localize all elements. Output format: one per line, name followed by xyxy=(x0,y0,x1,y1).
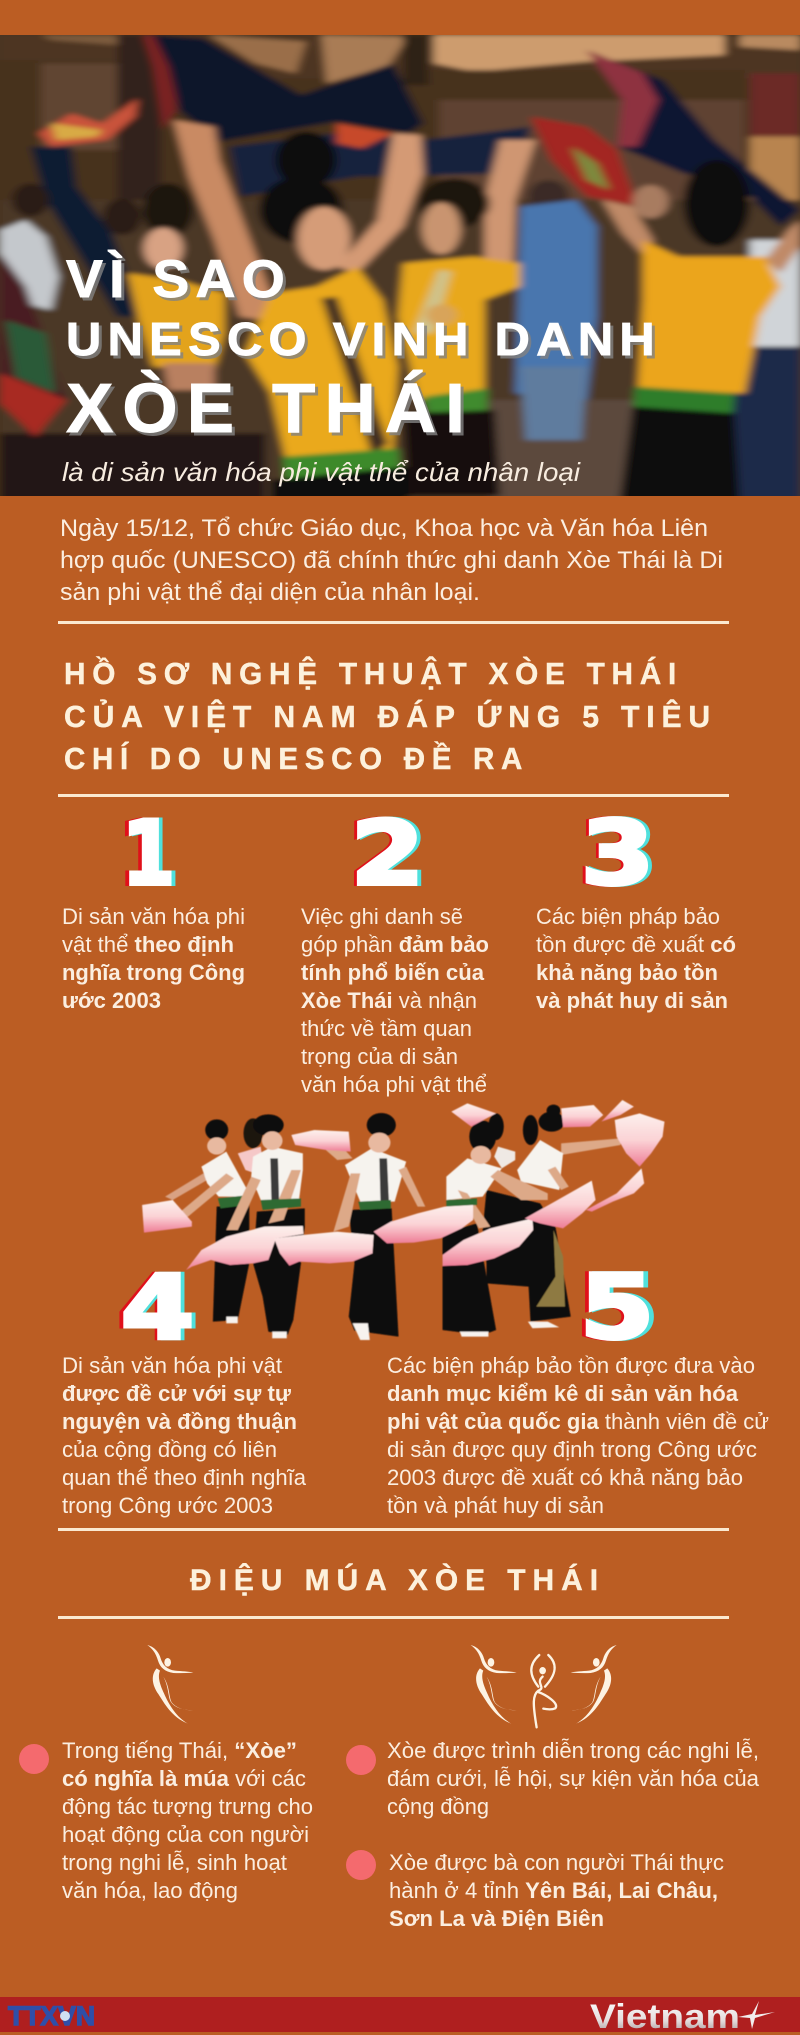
number 2: 2 xyxy=(348,802,422,905)
criterion 5 text: 2003 được đề xuất có khả năng bảo xyxy=(387,1465,743,1490)
heading: five criteria xyxy=(64,655,717,776)
criterion 2 text: thức về tầm quan xyxy=(301,1016,472,1041)
heading: the Xòe Thái dance: ĐIỆU MÚA XÒE THÁI xyxy=(190,1563,605,1597)
criterion 3 text: và phát huy di sản xyxy=(536,988,728,1013)
criterion 2 text: văn hóa phi vật thể xyxy=(301,1072,487,1097)
text: meaning of Xòe: động tác tượng trưng cho xyxy=(62,1794,313,1819)
criterion 2 text: tính phổ biến của xyxy=(301,960,484,985)
text: meaning of Xòe: trong nghi lễ, sinh hoạt xyxy=(62,1850,288,1875)
criterion 4 text: trong Công ước 2003 xyxy=(62,1493,273,1518)
number 4: 4 xyxy=(124,1256,198,1359)
dancer B xyxy=(226,1114,305,1335)
number 5: 5 xyxy=(583,1256,659,1359)
icon: three dancers xyxy=(471,1645,617,1727)
white shoes xyxy=(226,1317,559,1340)
criterion 4 text: được đề cử với sự tự xyxy=(62,1381,292,1406)
number 5: 5 xyxy=(576,1256,652,1359)
second woman xyxy=(398,140,536,496)
criterion 1 text: vật thể theo định xyxy=(62,932,234,957)
dancer D xyxy=(443,1113,548,1335)
text: provinces: Sơn La và Điện Biên xyxy=(389,1906,604,1931)
footer bar xyxy=(0,1997,800,2035)
criterion 3 text xyxy=(536,904,736,1013)
intro text: sản phi vật thể đại diện của nhân loại. xyxy=(60,579,480,606)
bullet: performances xyxy=(346,1745,376,1775)
criterion 4 text: của cộng đồng có liên xyxy=(62,1437,277,1462)
dancer C xyxy=(326,1113,425,1337)
title: VÌ SAO xyxy=(66,249,291,309)
criterion 2 text: góp phần đảm bảo xyxy=(301,932,489,957)
criterion 2 text: trọng của di sản xyxy=(301,1044,458,1069)
criterion 2 text: Việc ghi danh sẽ xyxy=(301,904,463,929)
number 2: 2 xyxy=(354,802,428,905)
text: provinces: hành ở 4 tỉnh Yên Bái, Lai Châu, xyxy=(389,1878,718,1903)
bullet: meaning of Xòe xyxy=(19,1744,49,1774)
criterion 5 text: di sản được quy định trong Công ước xyxy=(387,1437,757,1462)
text: meaning of Xòe: Trong tiếng Thái, “Xòe” xyxy=(62,1738,297,1763)
text: meaning of Xòe: có nghĩa là múa với các xyxy=(62,1766,306,1791)
criterion 5 text: Các biện pháp bảo tồn được đưa vào xyxy=(387,1353,755,1378)
text: provinces: Xòe được bà con người Thái thực xyxy=(389,1850,724,1875)
criterion 2 text xyxy=(301,904,489,1097)
number 4: 4 xyxy=(121,1256,194,1359)
number 1: 1 xyxy=(118,802,172,905)
criterion 5 text xyxy=(387,1353,769,1518)
text: performances xyxy=(387,1738,759,1819)
number 5: 5 xyxy=(580,1256,654,1359)
criterion 4 text xyxy=(62,1353,306,1518)
heading: five criteria: CỦA VIỆT NAM ĐÁP ỨNG 5 TIÊU xyxy=(64,698,717,734)
criterion 1 text: Di sản văn hóa phi xyxy=(62,904,245,929)
criterion 4 text: Di sản văn hóa phi vật xyxy=(62,1353,283,1378)
number 2: 2 xyxy=(351,802,424,905)
criterion 1 text: nghĩa trong Công xyxy=(62,960,245,985)
number 3: 3 xyxy=(578,802,652,905)
logo: TTXVN: TTXVN xyxy=(8,2001,95,2031)
number 3: 3 xyxy=(584,802,658,905)
criterion 3 text: tồn được đề xuất có xyxy=(536,932,736,957)
blue man xyxy=(515,180,668,440)
text: provinces xyxy=(389,1850,724,1931)
right woman xyxy=(602,160,800,500)
criterion 5 text: danh mục kiểm kê di sản văn hóa xyxy=(387,1381,738,1406)
left colourful scarf xyxy=(31,98,143,317)
text: meaning of Xòe: hoạt động của con người xyxy=(62,1822,309,1847)
heading: five criteria: HỒ SƠ NGHỆ THUẬT XÒE THÁI xyxy=(64,655,683,691)
text: performances: Xòe được trình diễn trong các nghi lễ, xyxy=(387,1738,759,1763)
icon: single dancer xyxy=(147,1645,193,1724)
intro text: hợp quốc (UNESCO) đã chính thức ghi danh Xòe Thái là Di xyxy=(60,547,723,574)
criterion 4 text: nguyện và đồng thuận xyxy=(62,1409,297,1434)
pink fans xyxy=(142,1100,664,1270)
subtitle: là di sản văn hóa phi vật thể của nhân loại xyxy=(62,457,581,487)
criterion 2 text: Xòe Thái và nhận xyxy=(301,988,477,1013)
number 1: 1 xyxy=(125,802,179,905)
scarves xyxy=(143,35,800,227)
dancer A xyxy=(165,1118,265,1322)
dancer E behind xyxy=(483,1105,620,1322)
heading: five criteria: CHÍ DO UNESCO ĐỀ RA xyxy=(64,741,529,776)
panel: hero photo xyxy=(0,27,800,510)
text: performances: cộng đồng xyxy=(387,1794,489,1819)
criterion 5 text: tồn và phát huy di sản xyxy=(387,1493,604,1518)
criterion 1 text xyxy=(62,904,245,1013)
criterion 5 text: phi vật của quốc gia thành viên đề cử xyxy=(387,1409,769,1434)
criterion 3 text: khả năng bảo tồn xyxy=(536,960,718,985)
title: UNESCO VINH DANH xyxy=(66,313,661,365)
criterion 1 text: ước 2003 xyxy=(62,988,161,1013)
text: meaning of Xòe xyxy=(62,1738,313,1903)
title: XÒE THÁI xyxy=(66,369,474,447)
intro text xyxy=(60,515,723,606)
criterion 3 text: Các biện pháp bảo xyxy=(536,904,720,929)
centre woman xyxy=(173,120,423,500)
number 3: 3 xyxy=(581,802,654,905)
number 4: 4 xyxy=(117,1256,193,1359)
photo: dancers with pink fans xyxy=(142,1100,664,1340)
logo: Vietnam+: Vietnam xyxy=(590,1998,740,2035)
title xyxy=(66,249,661,447)
intro text: Ngày 15/12, Tổ chức Giáo dục, Khoa học và Văn hóa Liên xyxy=(60,515,708,542)
text: meaning of Xòe: văn hóa, lao động xyxy=(62,1878,238,1903)
text: performances: đám cưới, lễ hội, sự kiện văn hóa của xyxy=(387,1766,759,1791)
number 1: 1 xyxy=(122,802,175,905)
criterion 4 text: quan thể theo định nghĩa xyxy=(62,1465,306,1490)
left crowd xyxy=(0,183,224,437)
bullet: provinces xyxy=(346,1850,376,1880)
